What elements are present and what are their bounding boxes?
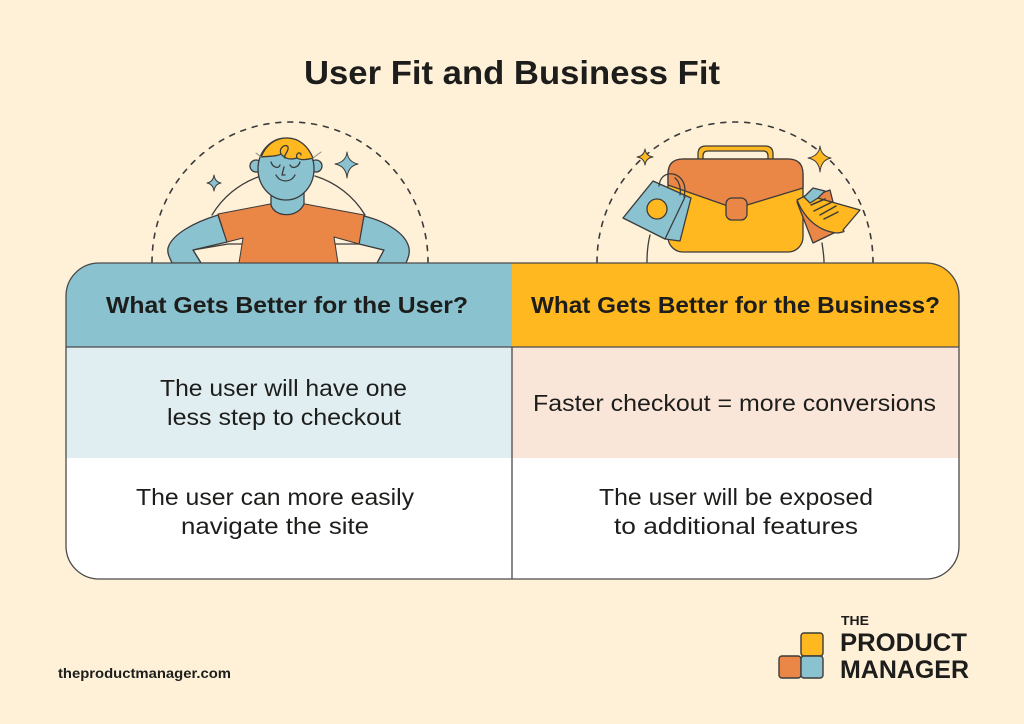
illustration: briefcase: [597, 122, 873, 262]
logo: [779, 613, 969, 684]
logo wordmark: MANAGER: [840, 656, 969, 684]
text: user row 1: less step to checkout: [167, 404, 402, 430]
illustration: user character: [152, 122, 428, 263]
row 2 background: [66, 458, 959, 579]
title: User Fit and Business Fit: [304, 54, 720, 91]
comparison table: [66, 263, 959, 579]
header: business column: [512, 263, 959, 347]
text: business row 2: to additional features: [614, 513, 858, 539]
text: user row 2: [136, 484, 414, 539]
text: user row 1: [160, 375, 407, 430]
text: business row 2: [599, 484, 873, 539]
text: user row 1: The user will have one: [160, 375, 407, 401]
logo mark: [779, 633, 823, 678]
text: user row 2: The user can more easily: [136, 484, 414, 510]
logo wordmark: THE: [841, 613, 869, 628]
logo wordmark: [840, 613, 969, 684]
header: user column: [66, 263, 512, 347]
text: business row 2: The user will be exposed: [599, 484, 873, 510]
logo wordmark: PRODUCT: [840, 629, 967, 657]
heading: user: What Gets Better for the User?: [106, 292, 468, 318]
text: user row 2: navigate the site: [181, 513, 369, 539]
text: business row 1: Faster checkout = more conversions: [533, 390, 936, 416]
table outline: [66, 263, 959, 579]
row 1: business cell: [512, 347, 959, 458]
row 1: user cell: [66, 347, 512, 458]
footer url: theproductmanager.com: [58, 665, 231, 681]
heading: business: What Gets Better for the Business?: [531, 292, 940, 318]
